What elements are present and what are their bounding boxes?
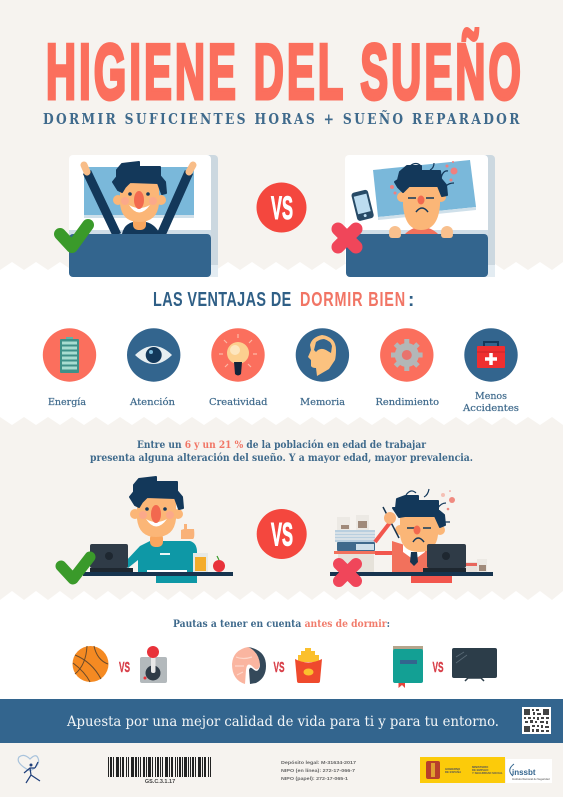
legal text: NIPO (papel): 272-17-065-1 bbox=[281, 776, 348, 782]
icon: red cross bbox=[339, 564, 356, 581]
small cups bbox=[466, 559, 487, 572]
logo: gobierno de espana: Y SEGURIDAD SOCIAL bbox=[472, 771, 503, 775]
logo: inssbt bbox=[506, 759, 552, 783]
barcode bbox=[108, 767, 213, 785]
legal text: NIPO (en línea): 272-17-066-7 bbox=[281, 768, 355, 774]
laptop bbox=[423, 544, 466, 572]
happy head bbox=[113, 162, 166, 234]
vs text: VS bbox=[119, 659, 130, 676]
illustration: rested man in bed bbox=[60, 155, 218, 277]
pile of papers and books bbox=[334, 530, 375, 572]
qr code bbox=[522, 707, 551, 734]
icon: botiquin bbox=[464, 328, 518, 382]
icon: red cross bbox=[338, 229, 356, 247]
hand with pencil bbox=[383, 507, 399, 538]
illustration: tired man in bed bbox=[338, 155, 495, 277]
logo: inssbt: inssbt bbox=[512, 768, 536, 777]
logo: gobierno de espana: GOBIERNO bbox=[445, 767, 461, 771]
icon: fries bbox=[295, 648, 322, 683]
icon: tv bbox=[452, 648, 497, 681]
label: rendimiento: Rendimiento bbox=[376, 397, 439, 408]
heading: ventajas: : bbox=[408, 290, 414, 311]
vs badge 2 bbox=[257, 509, 307, 559]
icon: creatividad bulb bbox=[211, 328, 265, 382]
tired head bbox=[395, 163, 454, 234]
icon: atencion eye bbox=[127, 328, 180, 382]
heading: ventajas bbox=[153, 288, 414, 311]
pain bubbles bbox=[390, 161, 458, 194]
vs text: VS bbox=[274, 659, 284, 676]
heading: ventajas: DORMIR BIEN bbox=[300, 288, 405, 311]
legal text: Depósito legal: M-31634-2017 bbox=[281, 760, 356, 766]
arm to head bbox=[375, 520, 395, 553]
heading: ventajas: LAS VENTAJAS DE bbox=[153, 288, 291, 311]
vs badge 2: VS bbox=[271, 516, 293, 552]
legal text bbox=[281, 760, 356, 782]
illustration: tired worker at desk bbox=[330, 489, 493, 583]
logo: health figure bbox=[18, 755, 40, 783]
vs text: VS bbox=[432, 659, 444, 676]
pain bubbles bbox=[441, 490, 455, 510]
label: menos accidentes: Accidentes bbox=[462, 403, 519, 414]
banner bbox=[0, 699, 563, 743]
logo: gobierno de espana: DE EMPLEO bbox=[472, 768, 489, 772]
juice glass bbox=[193, 553, 208, 572]
logo: inssbt: Instituto Nacional de Seguridad bbox=[512, 778, 550, 781]
icon: book bbox=[393, 646, 423, 688]
laptop bbox=[90, 544, 133, 572]
vs badge 1 bbox=[256, 182, 306, 232]
illustration: rested worker at desk bbox=[61, 477, 233, 583]
text block: prevalencia: presenta alguna alteración del sueño. Y a mayor edad, mayor prevalencia. bbox=[90, 453, 473, 464]
text block: prevalencia bbox=[90, 440, 473, 464]
phone bbox=[351, 189, 374, 221]
heading: pautas: Pautas a tener en cuenta antes de dormir: bbox=[173, 619, 390, 630]
label: atencion: Atención bbox=[129, 397, 175, 408]
banner text: Apuesta por una mejor calidad de vida para ti y para tu entorno. bbox=[66, 714, 499, 730]
label: energia: Energía bbox=[48, 397, 86, 408]
label: menos accidentes: Menos bbox=[475, 391, 507, 402]
vs badge 1: VS bbox=[271, 190, 293, 226]
icon: energia battery bbox=[43, 328, 96, 382]
icon: rendimiento gear bbox=[380, 328, 433, 382]
apple bbox=[213, 556, 225, 572]
thumb up hand bbox=[181, 524, 194, 539]
logo: gobierno de espana bbox=[420, 757, 505, 783]
label: menos accidentes bbox=[462, 391, 519, 414]
logo: gobierno de espana: MINISTERIO bbox=[472, 765, 489, 769]
logo: gobierno de espana: DE ESPAÑA bbox=[445, 769, 461, 774]
subtitle: DORMIR SUFICIENTES HORAS + SUEÑO REPARADOR bbox=[43, 111, 520, 128]
coffee cups bbox=[337, 515, 369, 530]
icon: green check bbox=[60, 225, 88, 247]
icon: basketball bbox=[72, 646, 108, 682]
barcode: GS.C.3.1.17 bbox=[145, 779, 175, 785]
icon: salmon bbox=[232, 647, 266, 684]
icon: joystick bbox=[140, 646, 167, 683]
text block: prevalencia: Entre un 6 y un 21 % de la población en edad de trabajar bbox=[137, 440, 427, 451]
arms raised bbox=[84, 165, 193, 235]
icon: green check bbox=[61, 557, 90, 579]
label: creatividad: Creatividad bbox=[209, 397, 268, 408]
icon: memoria head bbox=[296, 328, 349, 382]
label: memoria: Memoria bbox=[300, 397, 345, 408]
